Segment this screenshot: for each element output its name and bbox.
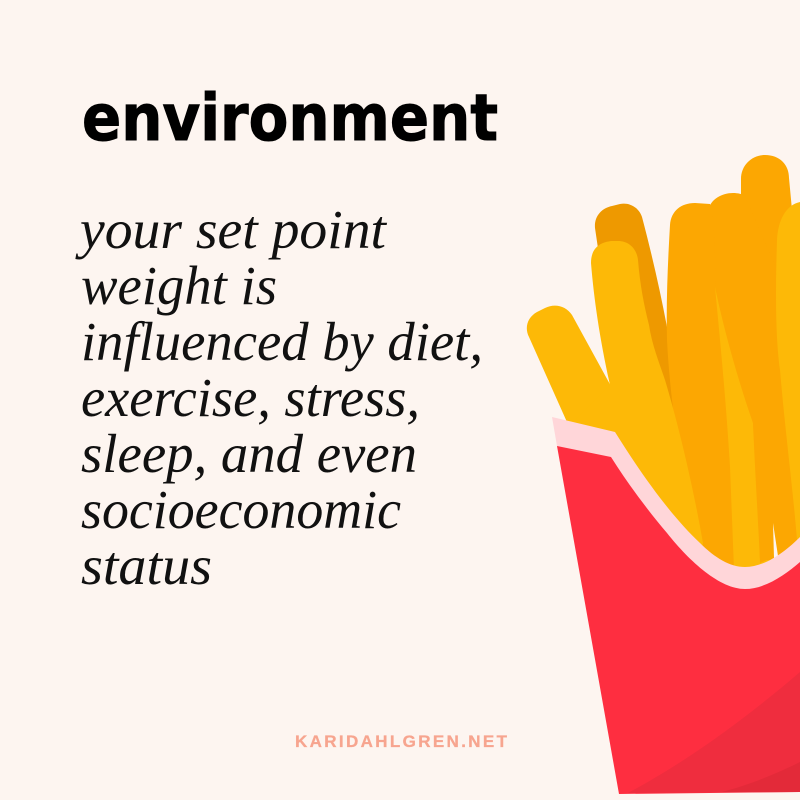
fry: orange middle fry	[708, 193, 795, 563]
text block: set point weight description: sleep, and even	[81, 423, 417, 484]
text block: set point weight description: socioeconomic	[81, 479, 401, 540]
white sliver between fries	[773, 523, 778, 558]
fry: right yellow fry	[776, 202, 800, 540]
fry: front yellow fry	[575, 241, 703, 560]
text block: set point weight description: status	[81, 535, 212, 596]
carton darker shadow	[722, 762, 800, 792]
text block: set point weight description	[75, 199, 483, 596]
fry: tallest orange fry	[725, 155, 800, 560]
text block: set point weight description: exercise, stress,	[81, 367, 420, 428]
fry: large orange fry	[667, 203, 734, 570]
fry: yellow filler behind orange fries	[712, 280, 780, 570]
carton shadow	[628, 672, 800, 793]
fry: dark back fry	[595, 204, 690, 470]
carton body	[557, 446, 800, 794]
text block: set point weight description: weight is	[81, 255, 277, 316]
title: environment	[82, 82, 498, 156]
carton rim	[552, 417, 800, 600]
text block: set point weight description: your set point	[75, 199, 388, 260]
website credit: KARIDAHLGREN.NET	[295, 732, 508, 751]
fry: left slanted fry	[527, 306, 650, 440]
text block: set point weight description: influenced by diet,	[81, 311, 483, 372]
icon: fries in red carton	[527, 155, 800, 794]
